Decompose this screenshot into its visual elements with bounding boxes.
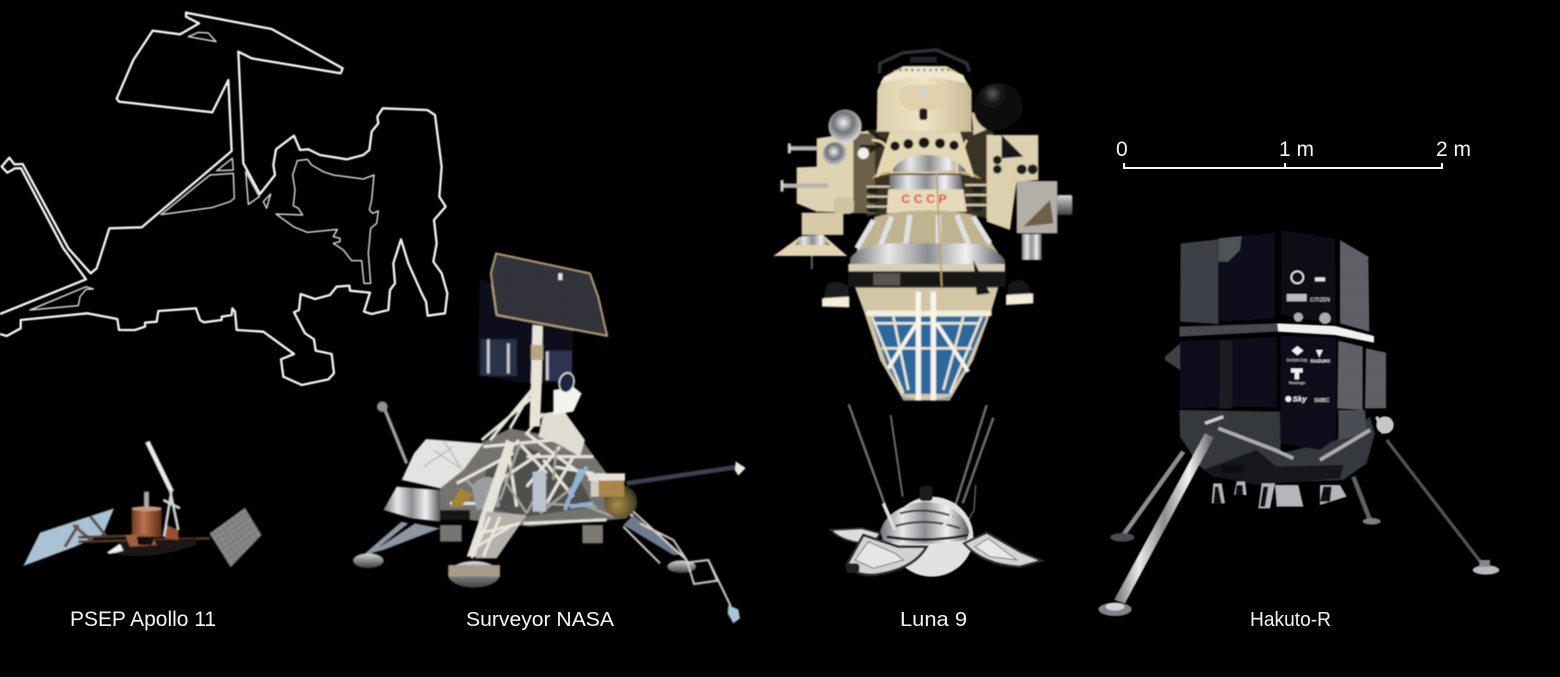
Luna 9 right petal <box>964 533 1042 567</box>
Hakuto inner struts <box>1218 428 1370 460</box>
Surveyor rear panel <box>477 278 573 383</box>
scale label: 1 m: 1 m <box>1279 138 1314 161</box>
Hakuto lower right panels <box>1337 341 1363 410</box>
Surveyor right leg <box>623 515 683 555</box>
Hakuto middle deck <box>1179 323 1374 343</box>
label: PSEP Apollo 11: PSEP Apollo 11 <box>70 608 216 631</box>
Hakuto lower bowl <box>1179 410 1375 483</box>
Hakuto sponsor logos lower: Sky <box>1293 394 1308 403</box>
label: Hakuto-R: Hakuto-R <box>1250 609 1331 631</box>
Luna black sphere <box>972 112 993 135</box>
Hakuto upper left panel <box>1180 239 1218 324</box>
Hakuto sponsor logos lower: SUZUKI <box>1310 358 1330 363</box>
Hakuto lower front panel <box>1281 336 1337 450</box>
Hakuto nozzles <box>1212 482 1347 508</box>
Hakuto upper solar array <box>1218 233 1275 322</box>
Luna backing mass <box>867 130 993 220</box>
label: Luna 9: Luna 9 <box>900 609 967 631</box>
Luna left cone <box>802 213 843 235</box>
Surveyor front leg <box>467 440 515 557</box>
Luna cream dome <box>877 66 972 132</box>
Luna 9 left petals <box>831 528 880 544</box>
Hakuto sponsor logos upper <box>1287 277 1330 304</box>
Surveyor left leg <box>365 522 440 553</box>
scale bar <box>1116 138 1471 168</box>
lander: Hakuto-R <box>1098 230 1499 616</box>
label: Surveyor NASA: Surveyor NASA <box>466 609 615 631</box>
Surveyor white box <box>402 439 483 488</box>
Surveyor solar panel <box>491 253 607 336</box>
Luna basket lattice <box>872 292 982 401</box>
Hakuto lower left panels <box>1179 340 1219 408</box>
Surveyor camera <box>538 410 585 457</box>
Luna top bump <box>899 85 949 110</box>
Hakuto sponsor logos lower: Sumitomo Corp. <box>1287 358 1308 363</box>
lander: PSEP Apollo 11 <box>23 442 262 567</box>
Luna top ring <box>879 50 969 73</box>
Luna left instruments <box>797 130 875 213</box>
lander: Luna 9 capsule <box>831 404 1042 577</box>
Surveyor shock absorbers <box>440 525 462 542</box>
PSEP right solar panel <box>209 508 262 567</box>
Luna lower dome <box>850 210 1005 272</box>
scale label: 2 m: 2 m <box>1436 138 1471 161</box>
Luna 9 sphere <box>890 497 973 577</box>
PSEP left solar panel <box>23 508 114 566</box>
Surveyor left tank <box>383 487 440 522</box>
Hakuto sponsor logos lower <box>1285 346 1330 404</box>
Luna silver box <box>1017 181 1057 233</box>
Luna CCCP belt <box>889 175 963 190</box>
Hakuto sponsor logos lower: Takasago <box>1288 381 1305 385</box>
astronaut and Apollo lander outline <box>0 13 447 385</box>
Surveyor boom <box>627 467 735 483</box>
Hakuto upper front panel <box>1281 230 1336 324</box>
PSEP copper drum <box>132 507 162 537</box>
scale label: 0: 0 <box>1116 138 1128 161</box>
Surveyor blue frame <box>565 467 593 510</box>
outline: lander and astronaut silhouette <box>0 13 447 385</box>
Surveyor core frame <box>440 428 633 527</box>
outline: inner gaps <box>30 32 378 310</box>
Surveyor mast <box>529 325 543 427</box>
Hakuto sponsor logos lower: SMBC <box>1314 398 1329 404</box>
Luna CCCP lettering: CCCP <box>901 192 947 206</box>
Hakuto upper right panel <box>1340 240 1369 332</box>
Hakuto front left leg <box>1114 433 1214 603</box>
Hakuto rear legs <box>1123 452 1183 535</box>
Surveyor antenna rod <box>385 410 407 463</box>
PSEP white boom <box>147 442 172 492</box>
Luna black band <box>848 271 1006 287</box>
Hakuto right leg <box>1387 440 1482 563</box>
Surveyor instrument arm <box>623 512 731 606</box>
Luna right box <box>987 135 1038 230</box>
scale bar line and ticks <box>1124 163 1442 168</box>
Luna blue basket <box>855 287 998 400</box>
Surveyor gold box and sphere <box>588 473 625 481</box>
Luna instrument ring <box>877 132 973 173</box>
Luna cable harness <box>872 140 973 177</box>
Luna thrusters <box>822 282 849 307</box>
Luna 9 antennas <box>849 404 993 523</box>
lander: Surveyor NASA <box>353 253 746 623</box>
PSEP support arms <box>78 536 210 542</box>
lander: Luna orbital stage <box>773 50 1072 401</box>
Hakuto sponsor logos upper: CITIZEN <box>1310 298 1330 304</box>
